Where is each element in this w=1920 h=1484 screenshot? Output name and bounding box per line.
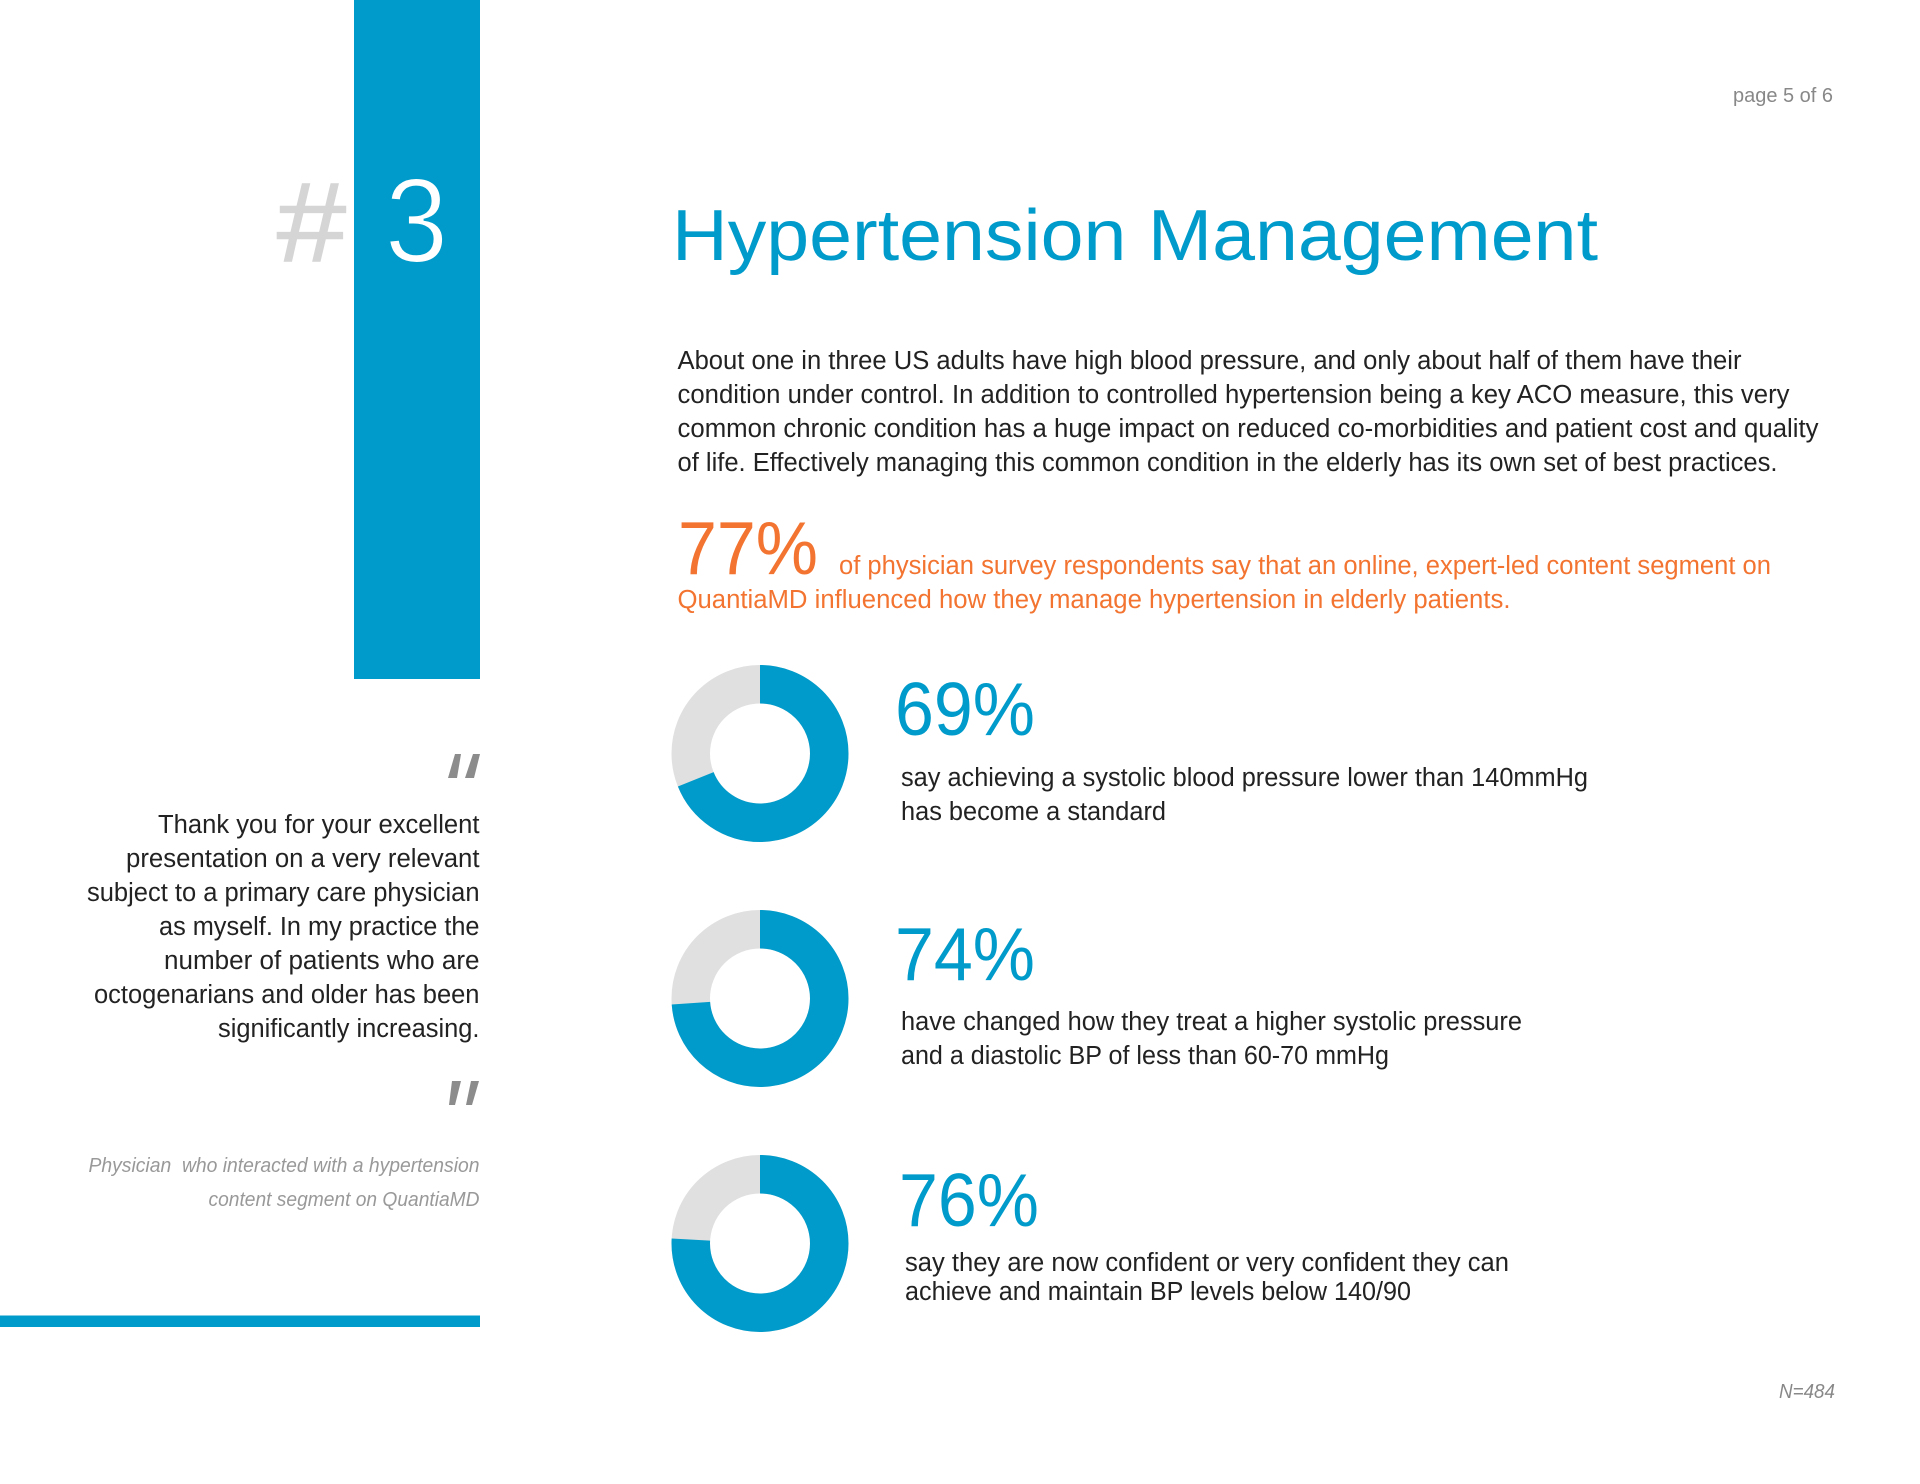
section number: 3 xyxy=(385,154,448,288)
quote text: presentation on a very relevant xyxy=(126,845,480,873)
donut chart: 74% xyxy=(691,929,829,1068)
section number: # xyxy=(277,160,346,285)
page number: page 5 of 6 xyxy=(1733,85,1833,107)
sample size note: N=484 xyxy=(1779,1381,1835,1403)
donut chart: 69% xyxy=(691,684,829,823)
intro text block: common chronic condition has a huge impact on reduced co-morbidities and patient cost and quality xyxy=(678,415,1819,443)
stat: 69% xyxy=(895,667,1588,826)
quote text: number of patients who are xyxy=(164,947,480,975)
quote attribution: content segment on QuantiaMD xyxy=(208,1189,480,1211)
callout: 77%: QuantiaMD influenced how they manage hypertension in elderly patients. xyxy=(678,586,1510,614)
stat: 76%: achieve and maintain BP levels below 140/90 xyxy=(905,1278,1411,1306)
icon: opening quote mark xyxy=(448,754,480,778)
donut chart: 76% xyxy=(691,1174,829,1313)
stat: 74%: and a diastolic BP of less than 60-70 mmHg xyxy=(901,1042,1389,1070)
blue vertical bar xyxy=(354,0,480,679)
quote text: significantly increasing. xyxy=(218,1015,480,1043)
section number xyxy=(277,154,448,288)
stat: 74%: 74% xyxy=(895,912,1035,996)
callout: 77%: 77% xyxy=(678,506,818,590)
quote text: subject to a primary care physician xyxy=(87,879,480,907)
stat: 69%: 69% xyxy=(895,667,1035,751)
quote text xyxy=(87,811,480,1043)
intro text block: of life. Effectively managing this common condition in the elderly has its own set of best practices. xyxy=(678,449,1778,477)
quote text: Thank you for your excellent xyxy=(158,811,480,839)
quote attribution: Physician who interacted with a hypertension xyxy=(88,1155,480,1177)
stat: 76% xyxy=(899,1158,1509,1306)
stat: 74%: have changed how they treat a higher systolic pressure xyxy=(901,1008,1522,1036)
title: Hypertension Management xyxy=(672,196,1598,276)
intro text block: condition under control. In addition to controlled hypertension being a key ACO measure, this very xyxy=(678,381,1790,409)
stat: 76%: 76% xyxy=(899,1158,1039,1242)
stat: 76%: say they are now confident or very confident they can xyxy=(905,1249,1509,1277)
callout: 77%: of physician survey respondents say that an online, expert-led content segment on xyxy=(839,552,1771,580)
quote text: octogenarians and older has been xyxy=(94,981,480,1009)
stat: 69%: has become a standard xyxy=(901,798,1166,826)
callout: 77% xyxy=(678,506,1771,614)
icon: closing quote mark xyxy=(449,1081,479,1105)
stat: 69%: say achieving a systolic blood pressure lower than 140mmHg xyxy=(901,764,1588,792)
quote text: as myself. In my practice the xyxy=(159,913,480,941)
intro text block: About one in three US adults have high blood pressure, and only about half of them have their xyxy=(678,347,1742,375)
quote attribution xyxy=(88,1155,480,1211)
stat: 74% xyxy=(895,912,1522,1070)
intro text block xyxy=(678,347,1819,477)
blue horizontal bar xyxy=(0,1316,480,1327)
